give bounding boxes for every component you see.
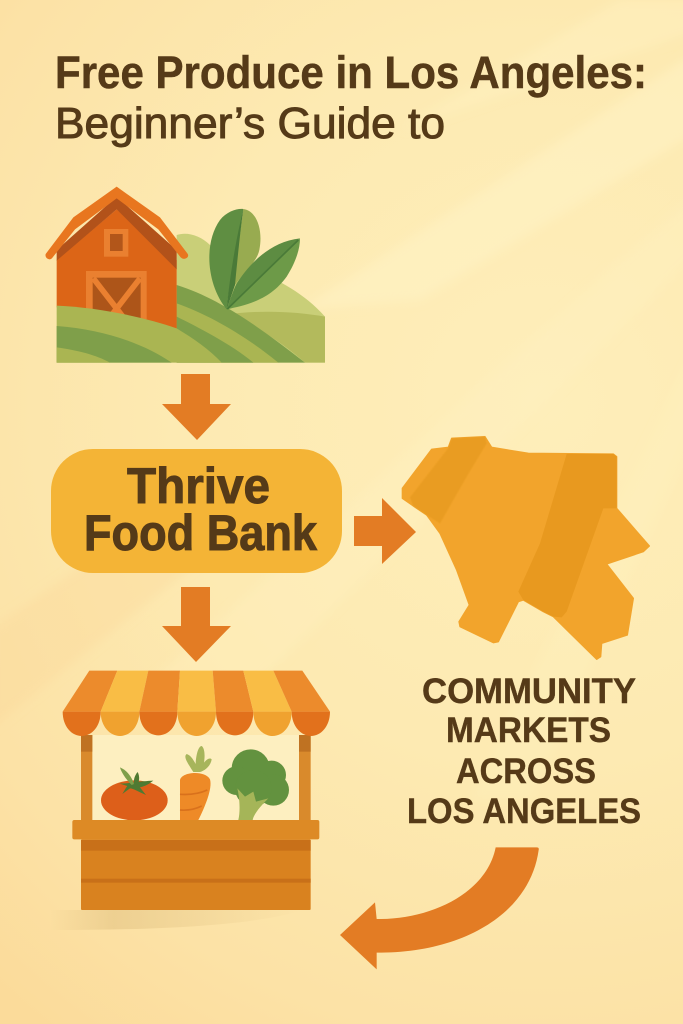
awning bbox=[63, 671, 330, 736]
label: community markets: LOS ANGELES bbox=[407, 792, 641, 831]
illustration: market stall bbox=[50, 671, 330, 930]
posts bbox=[81, 735, 311, 820]
panel: Thrive Food Bank: Food Bank bbox=[84, 505, 317, 561]
label: community markets: COMMUNITY bbox=[422, 672, 636, 711]
label: community markets bbox=[407, 672, 641, 831]
panel: Thrive Food Bank: Thrive bbox=[127, 458, 270, 514]
field stripes bbox=[177, 285, 305, 363]
back hill bbox=[177, 234, 325, 363]
foreground field bbox=[57, 306, 222, 363]
icon: carrot bbox=[180, 746, 212, 820]
illustration: farm with barn and leaves bbox=[45, 187, 325, 363]
stall shadow bbox=[50, 910, 303, 930]
label: community markets: ACROSS bbox=[456, 752, 596, 791]
icon: broccoli bbox=[222, 749, 289, 820]
right field bbox=[230, 312, 325, 363]
barn bbox=[45, 187, 188, 329]
map: Los Angeles county bbox=[402, 437, 649, 659]
icon: tomato bbox=[101, 767, 168, 820]
title bbox=[55, 47, 647, 148]
label: community markets: MARKETS bbox=[446, 711, 611, 750]
arrow: curved back to market bbox=[340, 847, 539, 969]
title: Beginner’s Guide to bbox=[55, 99, 445, 148]
arrow: farm down to food bank bbox=[162, 374, 231, 440]
stall interior bbox=[92, 735, 299, 820]
leaves bbox=[209, 209, 300, 309]
arrow: food bank to map bbox=[354, 498, 416, 564]
title: Free Produce in Los Angeles: bbox=[55, 47, 647, 98]
arrow: food bank down to market bbox=[162, 587, 231, 662]
counter bbox=[72, 820, 319, 910]
panel: Thrive Food Bank bbox=[51, 449, 342, 573]
